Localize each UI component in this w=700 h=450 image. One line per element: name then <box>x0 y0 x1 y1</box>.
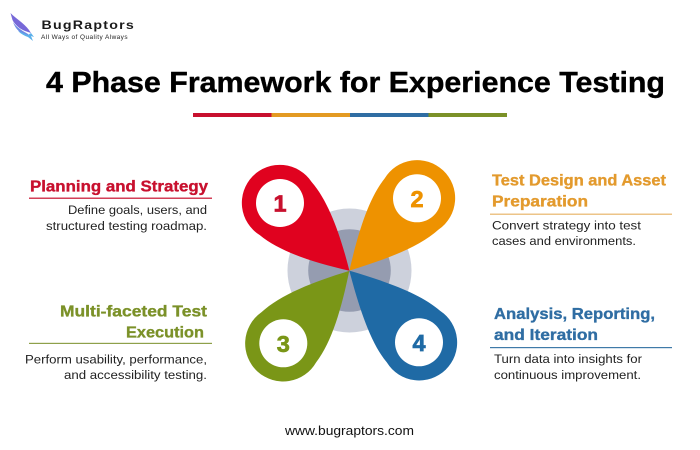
heading: Execution <box>126 325 204 342</box>
body text: Perform usability, performance, <box>25 352 207 366</box>
outer ring <box>288 208 412 332</box>
heading: Multi-faceted Test <box>60 304 207 321</box>
petal 3: 3 <box>277 331 290 357</box>
heading: Test Design and Asset <box>492 173 666 190</box>
body text: Convert strategy into test <box>492 218 642 232</box>
title: 4 Phase Framework for Experience Testing <box>46 67 665 99</box>
logo: BugRaptors <box>10 13 135 41</box>
body text: Turn data into insights for <box>494 352 642 366</box>
body text: cases and environments. <box>492 234 636 248</box>
petal 3 <box>229 245 377 397</box>
panel: Test Design and Asset Preparation <box>490 173 672 248</box>
panel: Planning and Strategy <box>29 178 212 233</box>
body text: continuous improvement. <box>494 368 641 382</box>
heading <box>492 173 666 211</box>
panel: Analysis, Reporting, and Iteration <box>490 306 672 382</box>
panel: Multi-faceted Test Execution <box>25 304 212 382</box>
heading: Analysis, Reporting, <box>494 306 655 323</box>
heading <box>494 306 655 344</box>
body text <box>25 352 207 382</box>
tagline: All Ways of Quality Always <box>41 35 128 41</box>
body text: Define goals, users, and <box>68 203 207 217</box>
body text: structured testing roadmap. <box>46 219 207 233</box>
brand name: BugRaptors <box>42 20 135 32</box>
icon: wing <box>10 13 34 41</box>
heading: and Iteration <box>494 327 598 344</box>
petal 4 <box>322 244 473 396</box>
petal 2: 2 <box>410 186 424 212</box>
diagram: four petals <box>226 144 473 397</box>
body text: and accessibility testing. <box>64 368 207 382</box>
heading: Preparation <box>492 194 588 211</box>
petal 2 <box>322 144 471 297</box>
body text <box>494 352 642 382</box>
footer: website: www.bugraptors.com <box>284 424 414 438</box>
inner ring <box>308 229 391 312</box>
heading <box>60 304 207 342</box>
body text <box>46 203 207 233</box>
petal 4: 4 <box>412 330 426 356</box>
petal 1: 1 <box>273 190 287 216</box>
petal 1 <box>226 149 376 298</box>
body text <box>492 218 642 248</box>
heading: Planning and Strategy <box>30 178 208 196</box>
title underline: four colour rule <box>193 113 507 117</box>
